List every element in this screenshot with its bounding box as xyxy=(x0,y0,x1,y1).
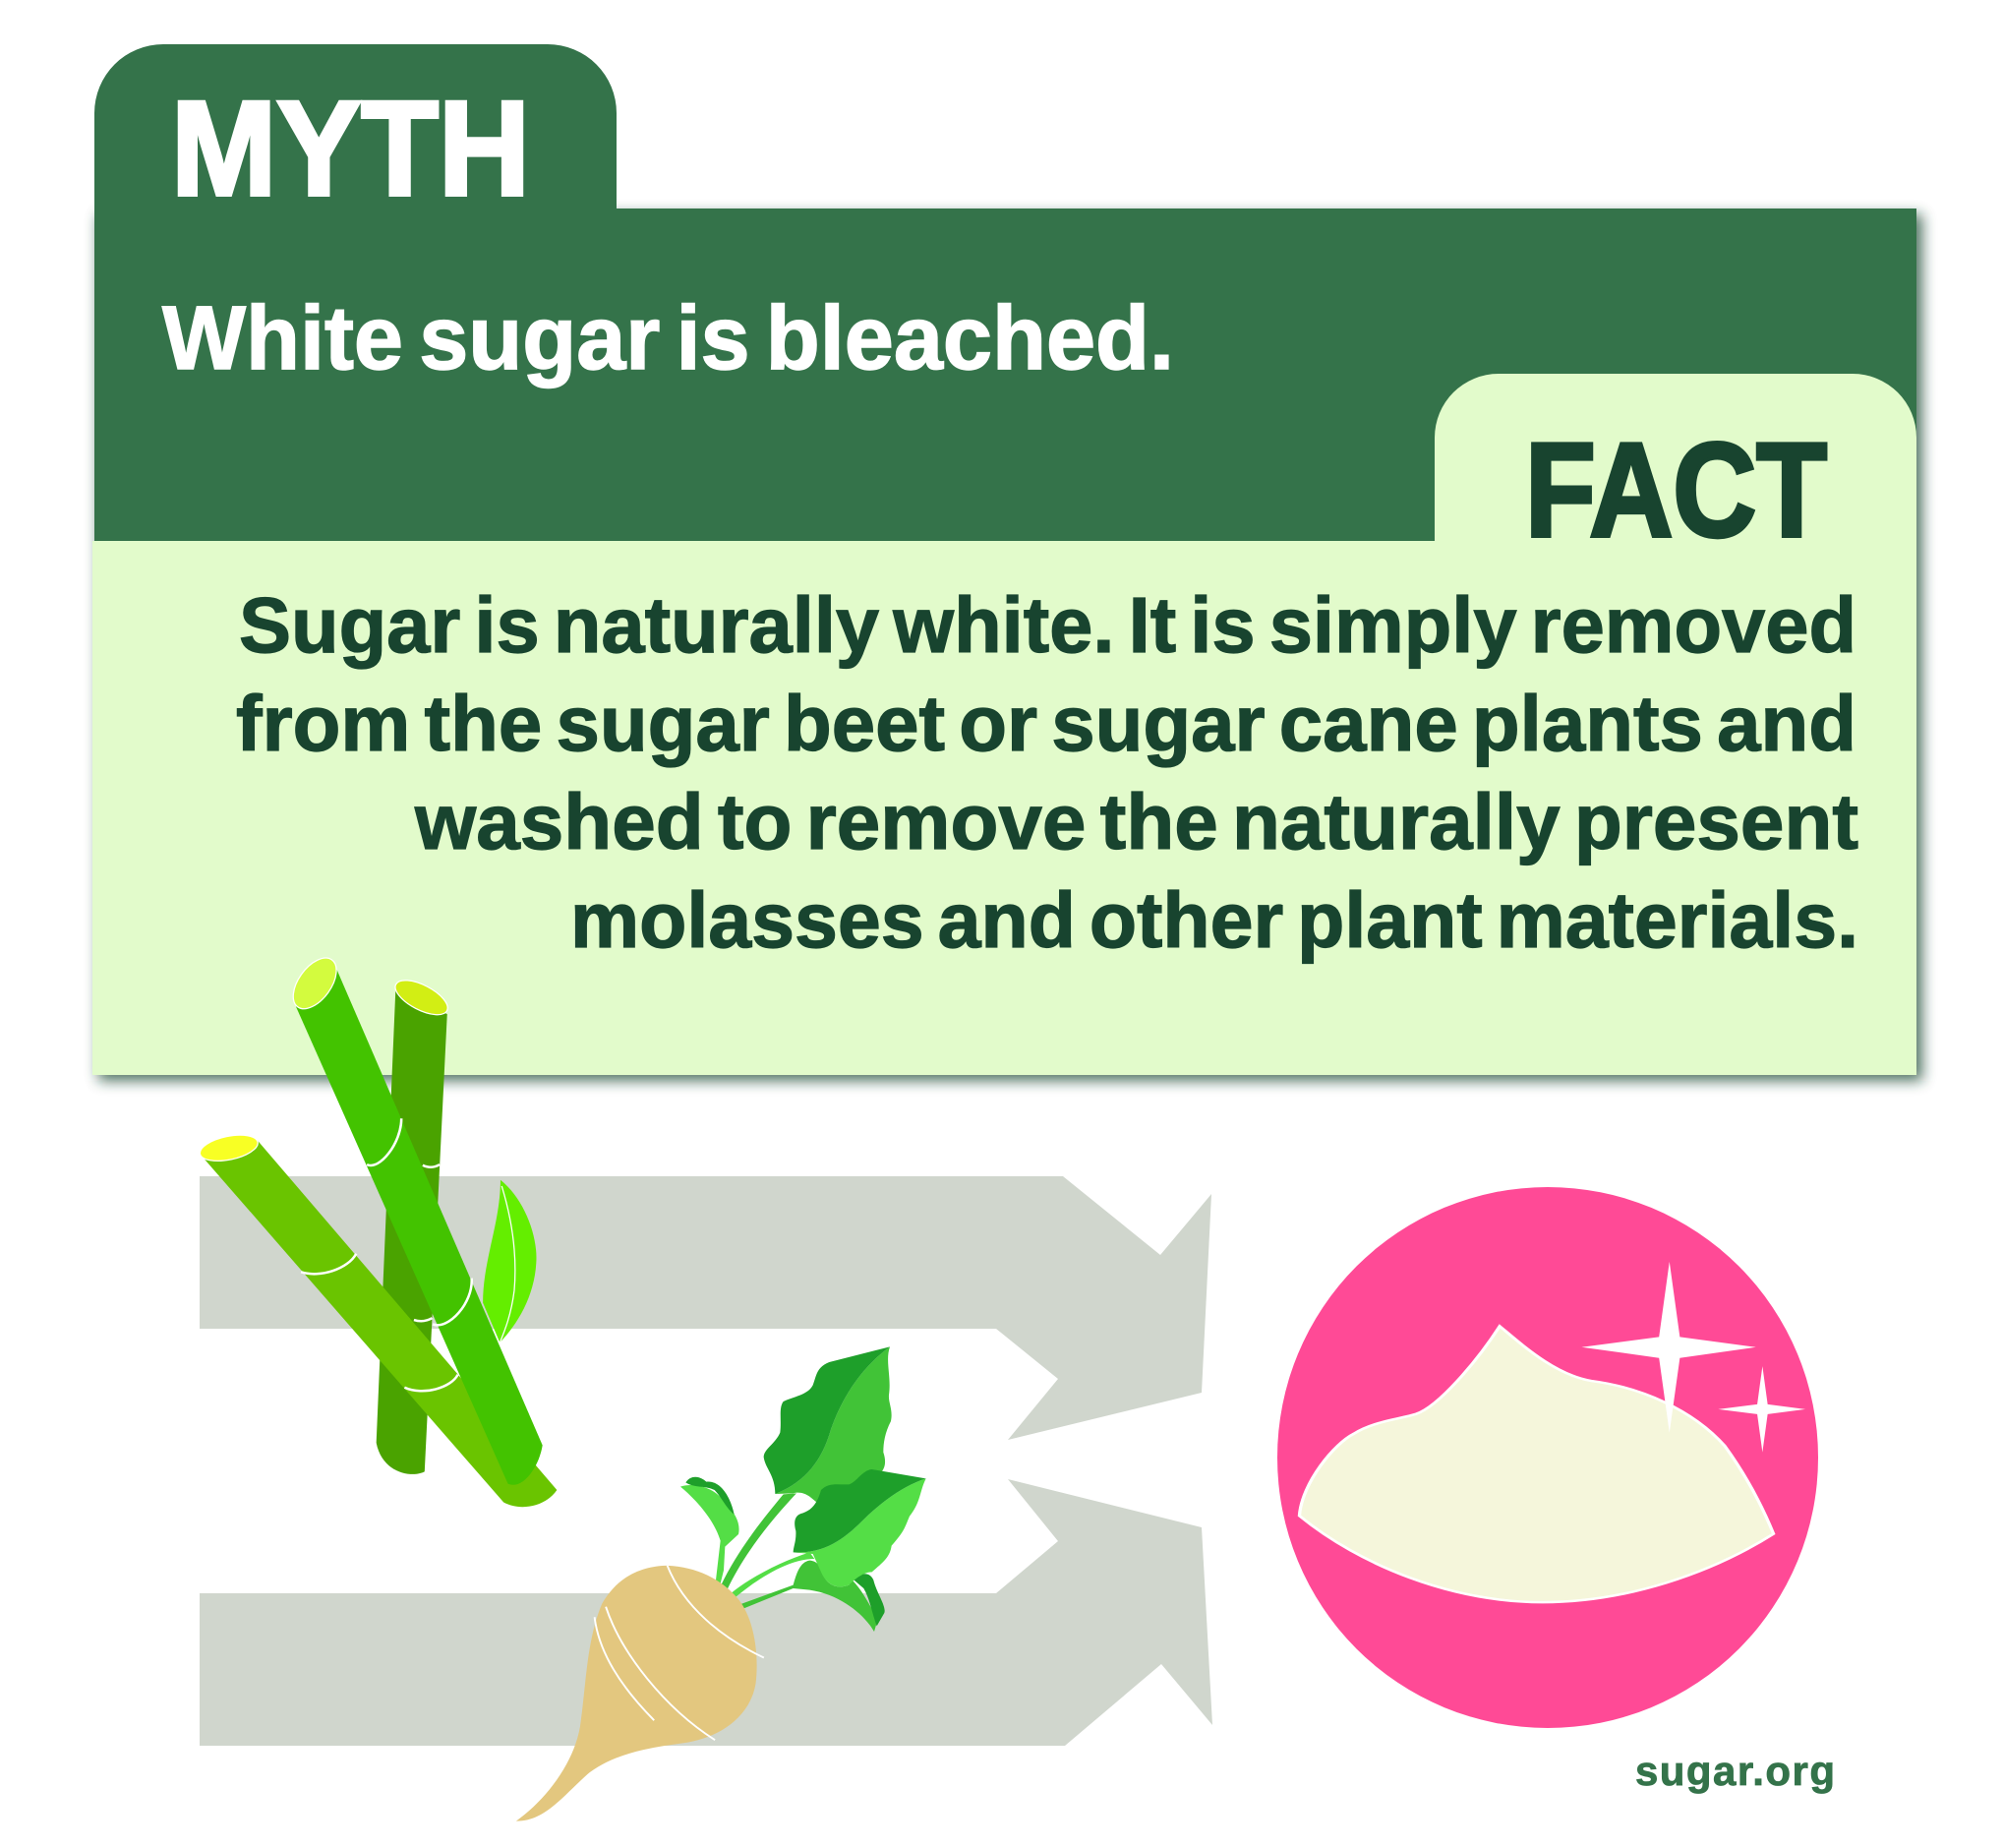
text: fact explanation xyxy=(236,581,1858,964)
panel: myth and fact card xyxy=(92,44,1922,1081)
back cane stalk xyxy=(377,986,447,1474)
left cane stalk xyxy=(204,1140,557,1507)
panel: myth background with tab xyxy=(94,44,1916,541)
text: website: sugar.org xyxy=(1635,1748,1835,1794)
heading: myth: MYTH xyxy=(171,74,530,224)
icon: sugar beet xyxy=(516,1346,926,1821)
text: fact explanation: Sugar is naturally white. It is simply removed xyxy=(239,581,1856,669)
beet leaves xyxy=(680,1346,926,1632)
text: myth statement: White sugar is bleached. xyxy=(162,288,1174,388)
icon: small sparkle xyxy=(1718,1366,1805,1453)
sugar pile xyxy=(1299,1326,1774,1602)
arrow: lower grey arrow from sugar beet xyxy=(200,1479,1212,1746)
icon: pink circle with sugar pile xyxy=(1277,1187,1818,1728)
middle cane stalk xyxy=(296,964,543,1485)
heading: fact: FACT xyxy=(1525,415,1827,565)
arrow: upper grey arrow from sugar cane xyxy=(200,1176,1211,1440)
icon: sugar cane xyxy=(198,951,557,1507)
beet root xyxy=(516,1566,764,1821)
cane node lines xyxy=(301,1118,472,1391)
icon: large sparkle xyxy=(1581,1262,1756,1433)
panel: fact background with tab xyxy=(92,374,1916,1075)
leaf xyxy=(483,1180,536,1342)
text: fact explanation: molasses and other plant materials. xyxy=(570,876,1858,964)
text: fact explanation: from the sugar beet or sugar cane plants and xyxy=(236,680,1856,767)
text: fact explanation: washed to remove the naturally present xyxy=(414,778,1858,865)
